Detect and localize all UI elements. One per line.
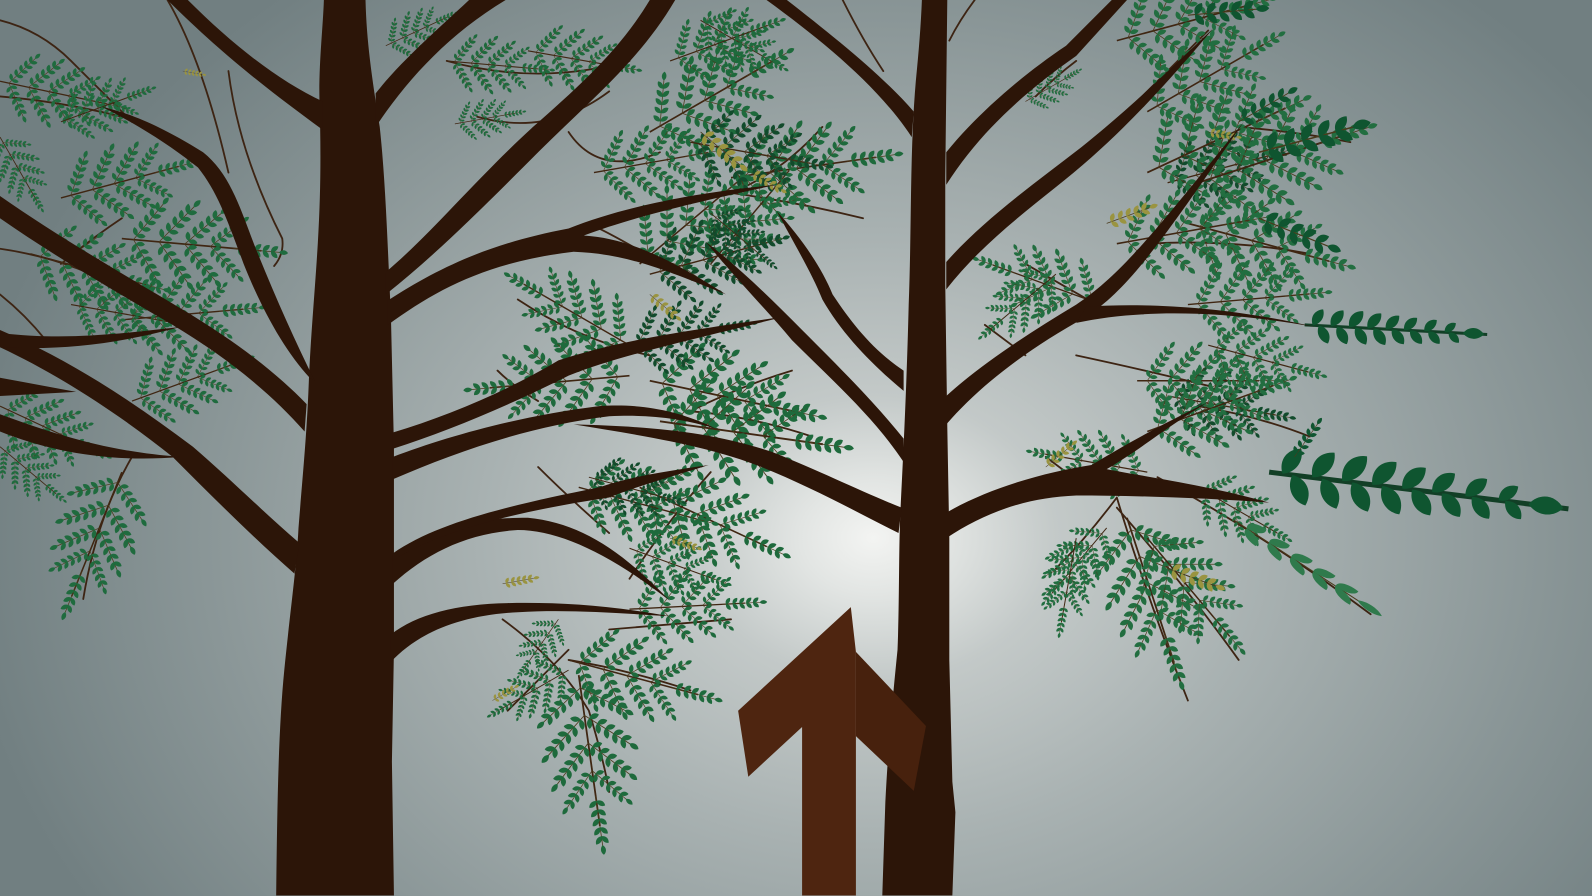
left tree xyxy=(0,0,784,895)
foliage: centre canopy xyxy=(376,0,911,862)
foliage: olive and yellow highlights xyxy=(182,67,1243,705)
right tree branches xyxy=(574,0,1315,538)
arrow right head xyxy=(856,652,926,791)
foliage: darker centre overlap xyxy=(581,98,1304,533)
left tree trunk xyxy=(276,0,394,895)
foliage: thin frond lower right xyxy=(1227,510,1388,626)
foliage: right tree xyxy=(958,0,1395,707)
foliage: left tree xyxy=(0,42,292,638)
right tree trunk xyxy=(882,0,955,895)
thin twigs behind foliage xyxy=(0,0,1371,792)
left tree branches xyxy=(0,0,784,662)
right tree xyxy=(574,0,1315,895)
foliage: long dark fronds on right xyxy=(1187,0,1573,541)
arrow pointing up xyxy=(738,607,926,895)
arrow shaft and left head xyxy=(738,607,856,895)
